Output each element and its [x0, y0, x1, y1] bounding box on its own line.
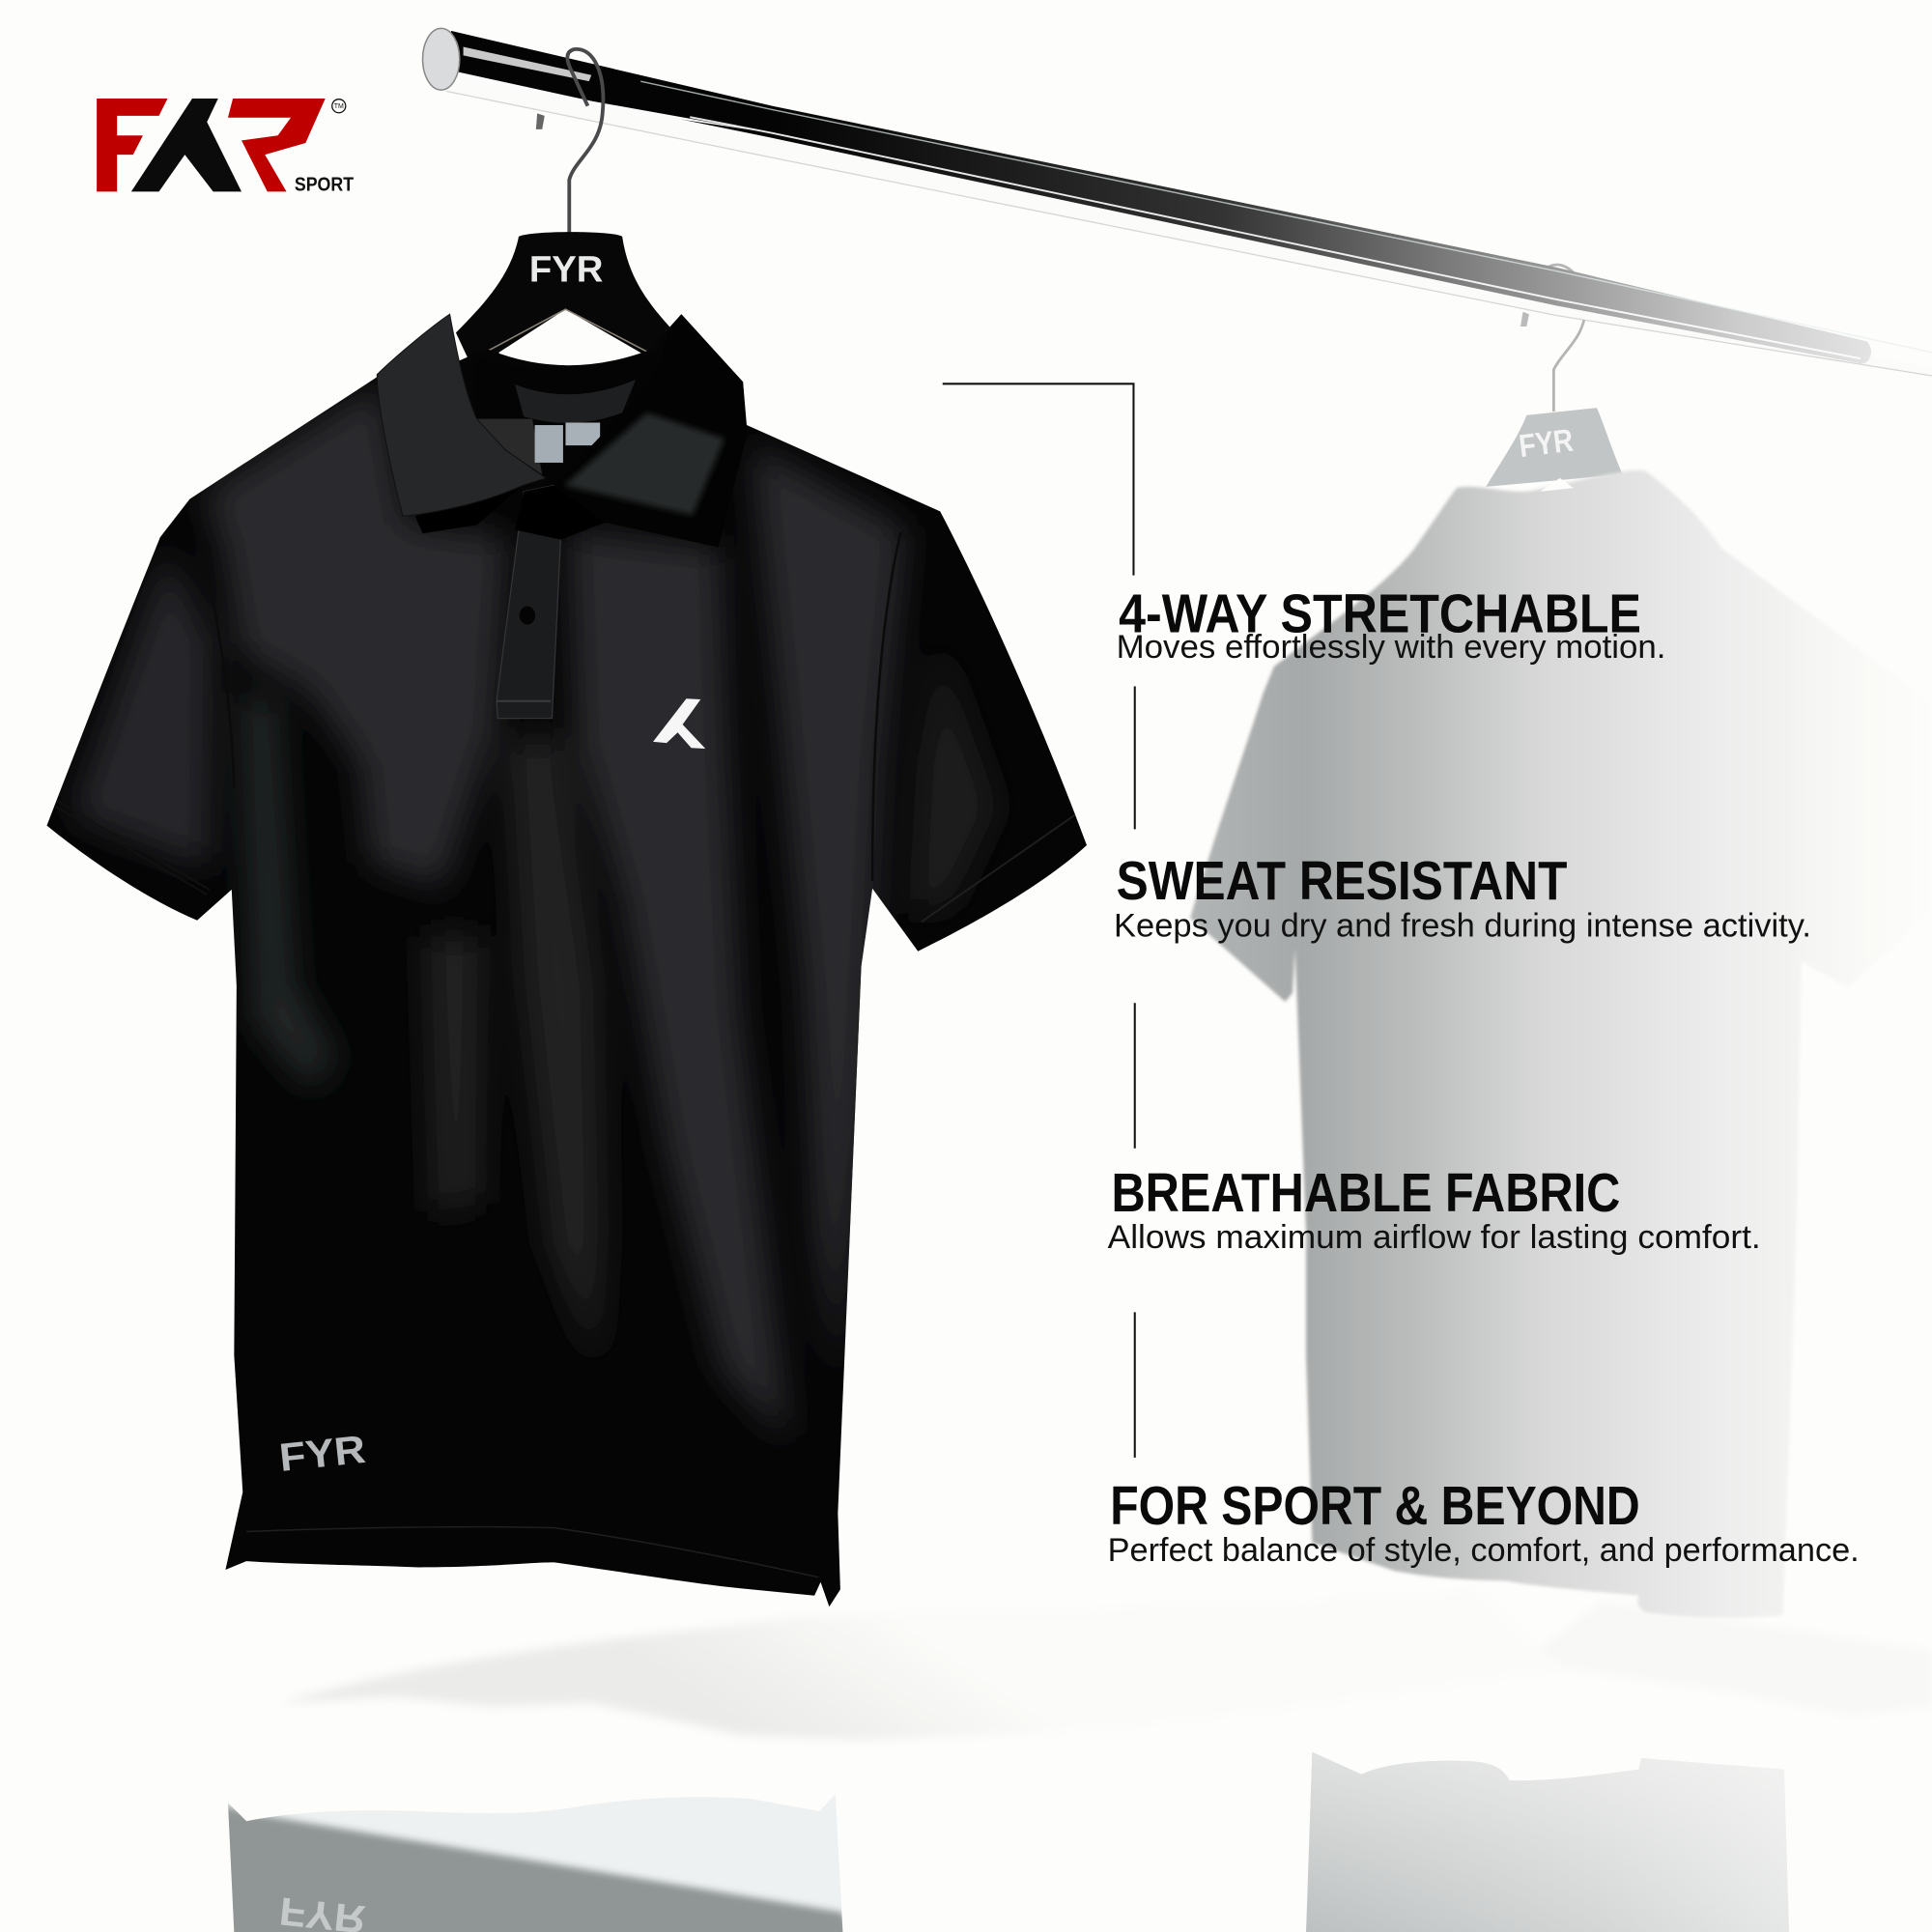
heading: SWEAT RESISTANT	[1117, 850, 1567, 911]
hanger opening edge	[460, 309, 658, 366]
description: Moves effortlessly with every motion.	[1117, 629, 1665, 666]
button	[519, 606, 536, 625]
description: Perfect balance of style, comfort, and performance.	[1108, 1532, 1860, 1569]
rail thin lower hairline	[690, 117, 1861, 358]
hanger logo: FYR	[529, 248, 603, 290]
collar left	[377, 314, 546, 516]
placket stitching	[497, 700, 551, 702]
sleeve cuff stitching right	[922, 814, 1076, 922]
rail end cap	[423, 28, 460, 90]
hem logo: FYR	[277, 1427, 368, 1480]
collar right lit panel	[564, 412, 724, 515]
ghost hanger hook	[1550, 265, 1586, 412]
feature: sweat resistant	[1114, 850, 1811, 944]
placket	[497, 486, 567, 719]
reflection fabric	[228, 1795, 842, 1932]
main hanger	[456, 49, 672, 372]
logo letter F	[97, 99, 167, 191]
hanger hook front	[567, 49, 603, 237]
neck label right	[565, 423, 600, 445]
connector line 4	[1134, 1312, 1136, 1458]
neck inner	[474, 352, 659, 486]
rail chrome white band	[446, 74, 1932, 376]
ghost shirt body	[1190, 470, 1932, 1618]
rail highlight top	[464, 46, 591, 81]
shirt body	[46, 314, 1087, 1606]
rail highlight lower	[456, 71, 764, 131]
reflection: main shirt	[228, 1795, 842, 1932]
chest logo mark	[653, 698, 705, 749]
feature: for sport and beyond	[1108, 1475, 1860, 1569]
logo letter R	[228, 99, 326, 191]
heading: BREATHABLE FABRIC	[1112, 1162, 1620, 1223]
neck rib	[515, 380, 636, 423]
brand logo	[97, 99, 355, 196]
connector line 3	[1134, 1003, 1136, 1149]
armhole seams	[189, 499, 900, 881]
clothes rail	[423, 28, 1932, 376]
rail lower outline	[446, 91, 1932, 376]
main black polo shirt	[46, 314, 1087, 1606]
callout bracket line	[943, 384, 1133, 576]
ghost hanger logo: FYR	[1517, 423, 1576, 465]
connector line 2	[1134, 686, 1136, 829]
floor shadow	[281, 1589, 1932, 1740]
rail tube	[451, 31, 1871, 363]
rail stub	[536, 113, 545, 129]
inner fabric	[477, 419, 542, 474]
rail thin top hairline	[640, 81, 1932, 353]
trademark: TM	[334, 103, 344, 110]
feature: breathable fabric	[1108, 1162, 1761, 1256]
logo letter K	[131, 99, 242, 191]
hem stitching	[246, 1527, 818, 1577]
collar right shadow band	[554, 314, 747, 547]
placket top shadow	[515, 486, 605, 540]
heading: FOR SPORT & BEYOND	[1110, 1475, 1640, 1536]
ghost shirt: faded back garment	[1190, 265, 1932, 1618]
reflection: ghost shirt	[1306, 1752, 1789, 1932]
logo word SPORT: SPORT	[295, 175, 355, 196]
trademark	[332, 99, 346, 113]
description: Keeps you dry and fresh during intense activity.	[1114, 907, 1811, 944]
ghost stub	[1520, 312, 1529, 327]
feature: 4-way stretchable	[1117, 582, 1665, 666]
ghost hanger	[1486, 408, 1623, 487]
sleeve cuff stitching left	[54, 801, 210, 895]
left collar shadow	[415, 486, 523, 533]
description: Allows maximum airflow for lasting comfort.	[1108, 1219, 1761, 1256]
hanger opening	[499, 309, 644, 372]
fabric light and folds	[54, 382, 1076, 1577]
hanger body	[456, 232, 672, 372]
ghost hanger opening	[1540, 478, 1574, 492]
neck label left	[535, 425, 563, 463]
heading: 4-WAY STRETCHABLE	[1119, 582, 1641, 643]
